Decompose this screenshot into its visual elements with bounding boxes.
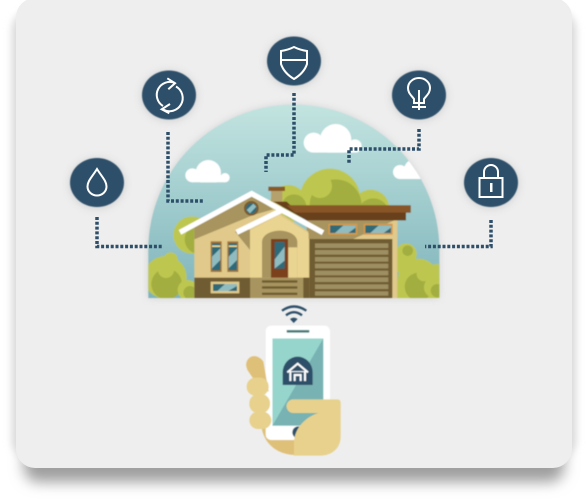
garage window left — [328, 224, 357, 235]
connector: shield — [266, 93, 294, 172]
porch steps — [262, 280, 297, 295]
main house body — [194, 195, 309, 298]
chimney — [268, 187, 285, 203]
palm back — [262, 428, 327, 455]
fingers — [246, 356, 271, 429]
bush bottom left — [148, 252, 195, 299]
sky dome — [148, 105, 439, 298]
icon: light bulb — [391, 70, 447, 122]
connector: drop — [97, 217, 162, 246]
tall window left — [211, 241, 222, 272]
scenery: clouds and bushes — [138, 124, 446, 301]
icon: padlock — [463, 158, 519, 209]
tall window right — [227, 241, 238, 272]
bush bottom right — [396, 242, 440, 299]
garage wing — [307, 220, 397, 298]
phone screen — [272, 338, 323, 426]
bush left of house — [172, 216, 200, 254]
phone — [266, 326, 330, 440]
wifi symbol — [282, 306, 306, 315]
icon: shield — [266, 36, 322, 88]
basement window — [211, 282, 239, 293]
connector: sync — [168, 132, 204, 201]
icon: sync arrows — [141, 70, 197, 122]
illustration: hand holding phone — [246, 306, 341, 456]
garage door slats — [315, 243, 388, 296]
garage window right — [364, 224, 393, 235]
round attic window — [244, 201, 259, 216]
white gable roof trim — [180, 194, 323, 233]
bushes behind roof — [270, 168, 390, 222]
illustration: house under dome — [138, 105, 446, 301]
connector: bulb — [349, 129, 419, 164]
cloud left — [185, 160, 230, 185]
entry arch and door — [262, 231, 297, 278]
thumb and palm — [287, 399, 341, 456]
app icon — [283, 357, 313, 385]
wifi dot — [290, 318, 298, 323]
icon: water drop — [69, 158, 125, 209]
connector: lock — [425, 220, 491, 246]
flat roof — [273, 202, 411, 220]
cloud right — [392, 160, 421, 180]
cloud top — [304, 124, 362, 155]
